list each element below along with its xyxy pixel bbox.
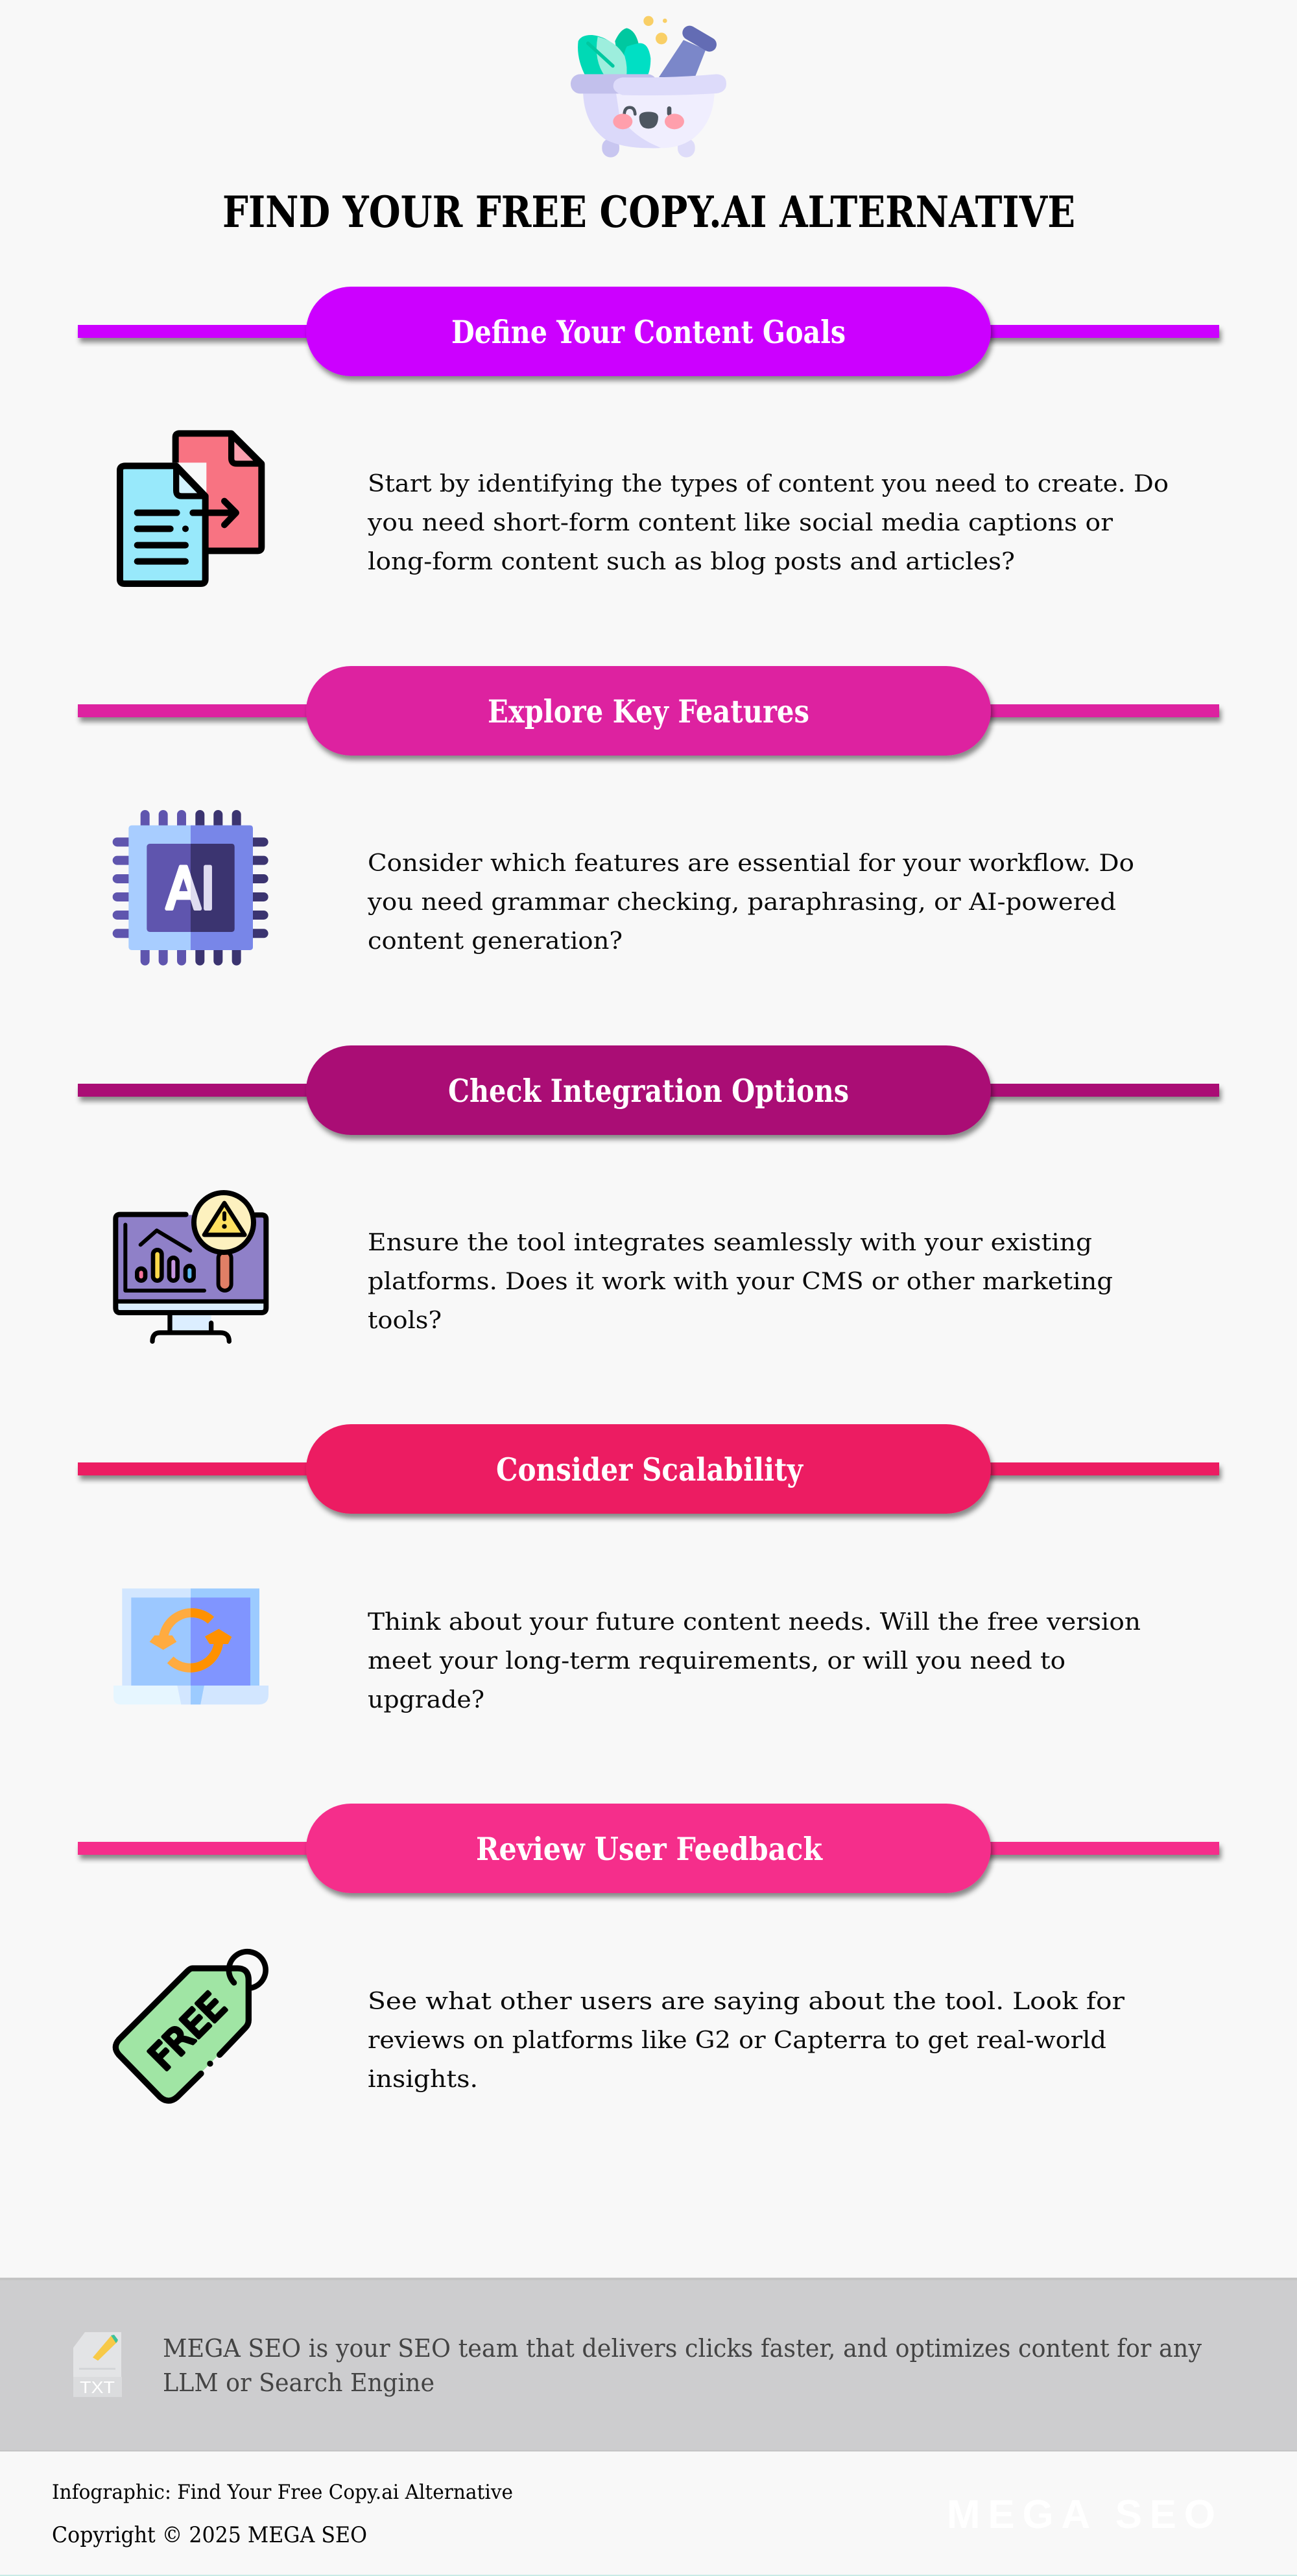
text block: content generation? bbox=[368, 928, 623, 955]
section header: Check Integration Options bbox=[448, 1072, 849, 1110]
section header: Explore Key Features bbox=[488, 693, 809, 730]
text block bbox=[368, 1609, 1141, 1713]
text block: tools? bbox=[368, 1307, 442, 1334]
section header bbox=[78, 666, 1219, 756]
promo text: LLM or Search Engine bbox=[163, 2368, 434, 2397]
wordmark: MEGA SEO bbox=[947, 2492, 1215, 2537]
icon: txt file with pencil: TXT bbox=[80, 2378, 115, 2397]
panel: step 2 explore key features bbox=[78, 666, 1219, 961]
panel: mega seo promo band bbox=[0, 2278, 1297, 2451]
panel: step 4 consider scalability bbox=[78, 1424, 1219, 1713]
icon: txt file with pencil bbox=[73, 2332, 122, 2397]
footer credit: Infographic: Find Your Free Copy.ai Alternative bbox=[52, 2481, 513, 2504]
text block: insights. bbox=[368, 2066, 478, 2093]
panel: step 5 review user feedback bbox=[78, 1804, 1219, 2101]
text block: you need grammar checking, paraphrasing, or AI-powered bbox=[367, 889, 1116, 916]
text block: Start by identifying the types of content you need to create. Do bbox=[368, 471, 1169, 497]
title: FIND YOUR FREE COPY.AI ALTERNATIVE bbox=[222, 187, 1075, 237]
icon: free price tag: FREE bbox=[141, 1985, 234, 2078]
text block: See what other users are saying about the tool. Look for bbox=[368, 1988, 1125, 2015]
text block bbox=[368, 1988, 1125, 2093]
text block bbox=[368, 1230, 1113, 1334]
text block: Think about your future content needs. Will the free version bbox=[368, 1609, 1141, 1636]
icon: AI chip bbox=[117, 815, 264, 961]
promo text bbox=[163, 2334, 1202, 2397]
icon: monitor with warning magnifier bbox=[115, 1193, 266, 1341]
icon: laptop with refresh arrows bbox=[113, 1588, 268, 1704]
text block: Ensure the tool integrates seamlessly with your existing bbox=[368, 1230, 1092, 1256]
panel: step 3 check integration options bbox=[78, 1045, 1219, 1341]
section header: Define Your Content Goals bbox=[451, 313, 846, 351]
copyright: Copyright © 2025 MEGA SEO bbox=[52, 2522, 367, 2548]
text block: meet your long-term requirements, or will you need to bbox=[368, 1648, 1065, 1675]
text block bbox=[367, 850, 1134, 955]
panel: step 1 define your content goals bbox=[78, 287, 1219, 584]
section header bbox=[78, 1804, 1219, 1893]
text block: platforms. Does it work with your CMS or other marketing bbox=[368, 1269, 1113, 1295]
text block: Consider which features are essential for your workflow. Do bbox=[368, 850, 1134, 877]
icon: two documents with arrow bbox=[120, 433, 261, 584]
icon: AI chip: AI bbox=[166, 855, 215, 922]
text block: upgrade? bbox=[368, 1687, 484, 1713]
section header: Review User Feedback bbox=[476, 1830, 823, 1868]
icon: mortar and pestle mascot bbox=[571, 16, 726, 158]
text block: long-form content such as blog posts and articles? bbox=[368, 549, 1015, 575]
section header bbox=[78, 287, 1219, 376]
text block: you need short-form content like social media captions or bbox=[367, 510, 1113, 536]
text block bbox=[367, 471, 1169, 575]
footer bbox=[0, 2481, 1297, 2576]
icon: free price tag bbox=[115, 1951, 266, 2101]
text block: reviews on platforms like G2 or Capterra to get real-world bbox=[368, 2027, 1106, 2054]
icon: AI chip: AI bbox=[166, 855, 215, 922]
section header bbox=[78, 1424, 1219, 1514]
section header bbox=[78, 1045, 1219, 1135]
section header: Consider Scalability bbox=[496, 1451, 803, 1488]
promo text: MEGA SEO is your SEO team that delivers clicks faster, and optimizes content for any bbox=[163, 2334, 1202, 2363]
